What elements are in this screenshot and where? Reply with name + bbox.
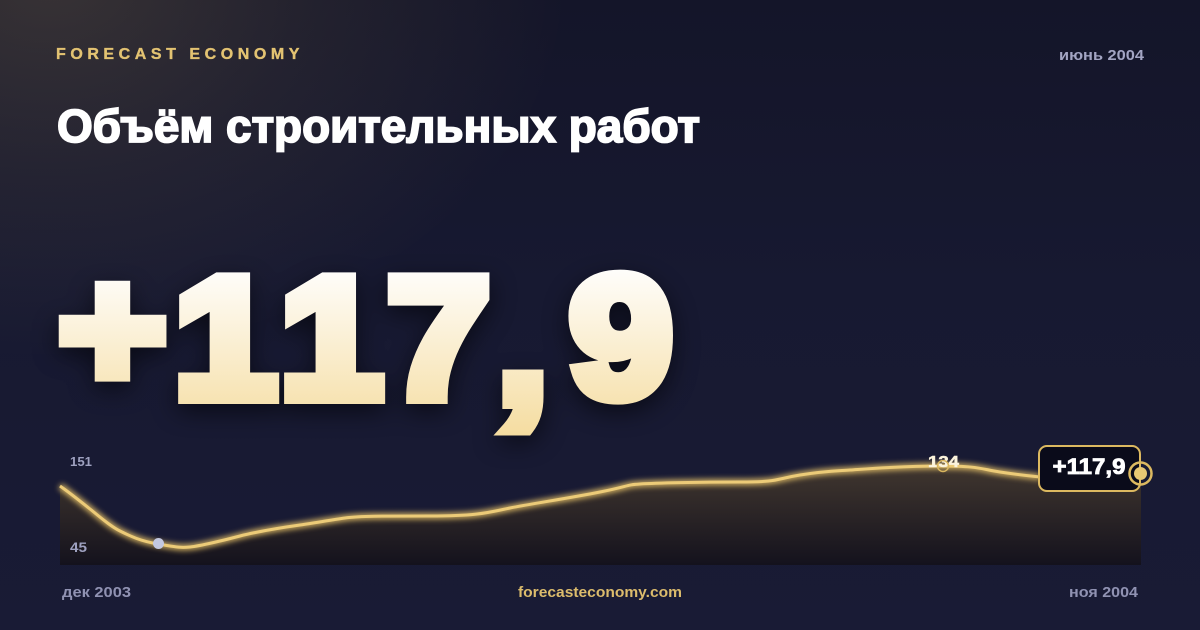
site url: forecasteconomy.com bbox=[518, 584, 682, 601]
end date: ноя 2004 bbox=[1069, 584, 1139, 601]
current value callout bbox=[1039, 446, 1140, 491]
maximum marker bbox=[938, 460, 948, 472]
chart line bbox=[60, 466, 1040, 547]
date label: июнь 2004 bbox=[1059, 47, 1145, 64]
line chart bbox=[60, 454, 1141, 565]
title: Объём строительных работ bbox=[57, 100, 700, 152]
big value: +117,9 bbox=[59, 241, 672, 447]
minimum marker bbox=[153, 538, 164, 549]
chart line glow bbox=[60, 466, 1040, 547]
current value callout: +117,9 bbox=[1052, 454, 1126, 479]
chart area fill bbox=[60, 466, 1141, 565]
start date: дек 2003 bbox=[62, 584, 131, 601]
end point marker bbox=[1130, 462, 1152, 484]
axis min label: 45 bbox=[70, 539, 87, 555]
big value: +117,9 bbox=[59, 233, 672, 439]
maximum value label: 134 bbox=[928, 454, 959, 471]
axis max label: 151 bbox=[70, 454, 92, 469]
brand label: FORECAST ECONOMY bbox=[56, 46, 304, 63]
